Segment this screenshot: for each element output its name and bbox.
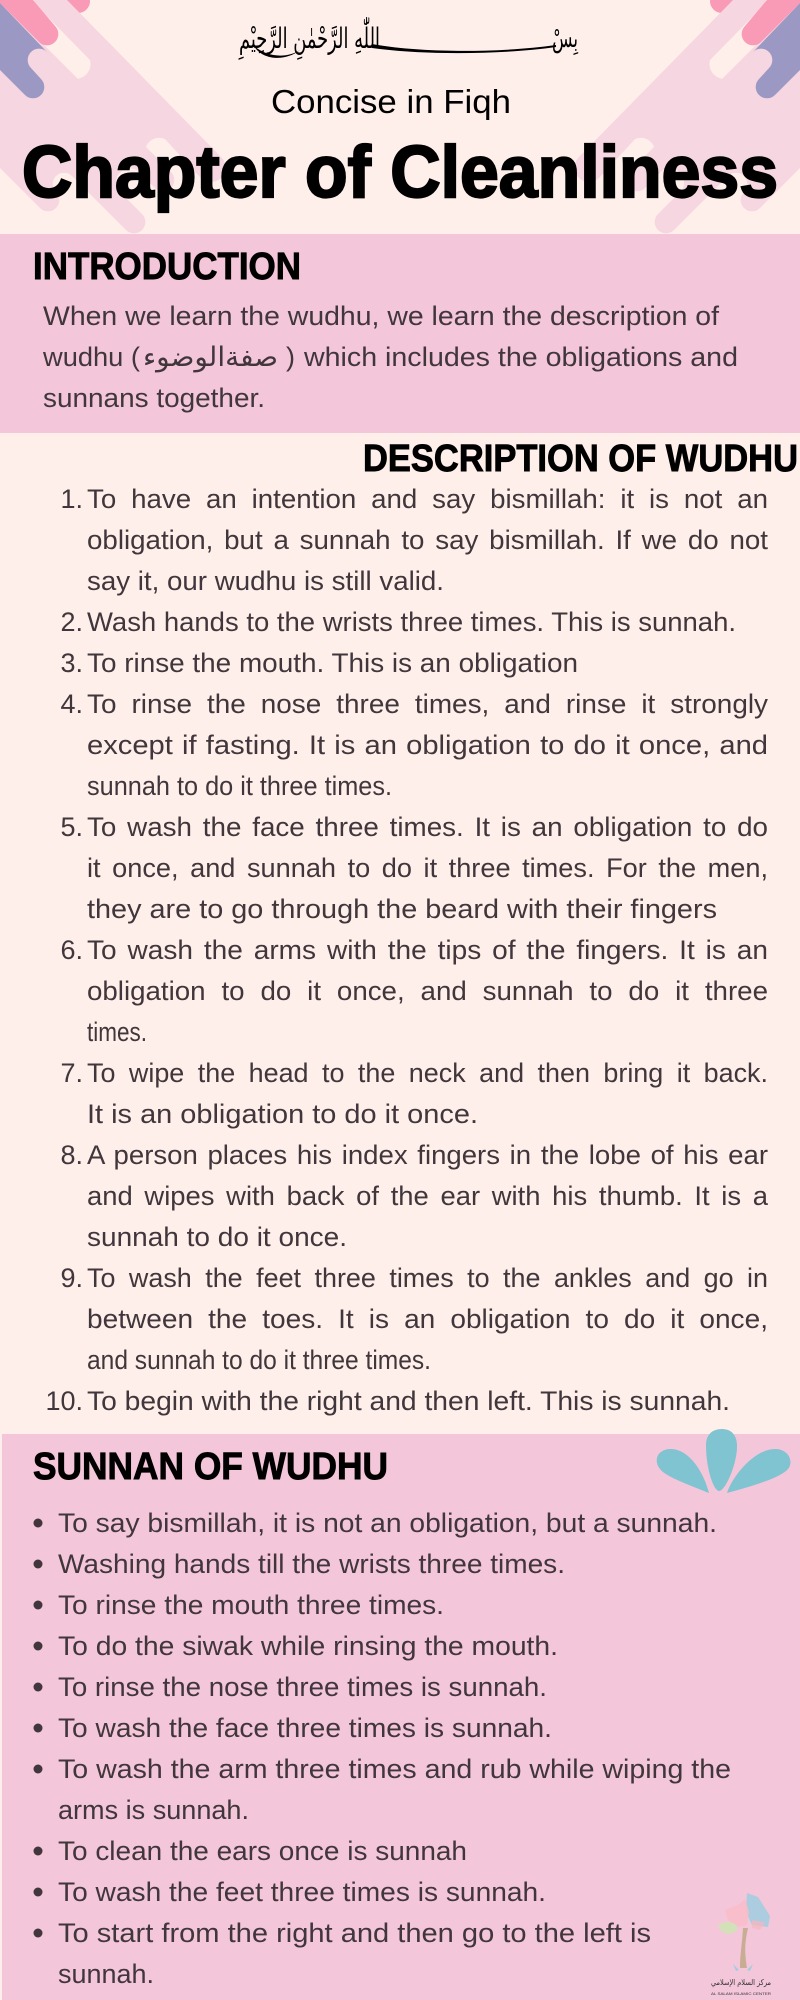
heading: introduction: INTRODUCTION bbox=[33, 246, 301, 288]
bullet list: sunnan items: To say bismillah, it is not an obligation, but a sunnah. bbox=[58, 1508, 717, 1538]
step 5: To wash the face three times. It is an obligation to do bbox=[87, 812, 768, 842]
step 5: they are to go through the beard with their fingers bbox=[87, 894, 717, 924]
step 7: It is an obligation to do it once. bbox=[87, 1099, 478, 1129]
step 9: To wash the feet three times to the ankles and go in bbox=[87, 1263, 768, 1293]
logo: Al Salam Islamic Center tree bbox=[711, 1893, 771, 1996]
step 8: sunnah to do it once. bbox=[87, 1222, 347, 1252]
step 7 bbox=[60, 1058, 768, 1129]
step 7: 7. bbox=[60, 1058, 83, 1088]
step 2: 2. bbox=[60, 607, 83, 637]
step 10: 10. bbox=[45, 1386, 83, 1416]
step 4: sunnah to do it three times. bbox=[87, 771, 392, 801]
step 6: To wash the arms with the tips of the fingers. It is an bbox=[87, 935, 768, 965]
step 5 bbox=[60, 812, 768, 924]
step 8 bbox=[60, 1140, 769, 1252]
text block: introduction bbox=[42, 301, 738, 413]
step 4: To rinse the nose three times, and rinse it strongly bbox=[87, 689, 769, 719]
panel: sunnan of wudhu bbox=[2, 1429, 800, 2000]
step 1: To have an intention and say bismillah: it is not an bbox=[87, 484, 768, 514]
text block: introduction: When we learn the wudhu, we learn the description of bbox=[43, 301, 720, 331]
step 3: 3. bbox=[60, 648, 83, 678]
step 5: it once, and sunnah to do it three times. For the men, bbox=[87, 853, 768, 883]
bullet list: sunnan items: To wash the feet three times is sunnah. bbox=[58, 1877, 546, 1907]
numbered list: description of wudhu bbox=[45, 484, 769, 1416]
step 1: say it, our wudhu is still valid. bbox=[87, 566, 444, 596]
bullet list: sunnan items: To rinse the mouth three times. bbox=[58, 1590, 444, 1620]
step 8: A person places his index fingers in the lobe of his ear bbox=[87, 1140, 768, 1170]
heading: sunnan of wudhu: SUNNAN OF WUDHU bbox=[33, 1446, 388, 1488]
step 1: obligation, but a sunnah to say bismillah. If we do not bbox=[87, 525, 768, 555]
text block: introduction: ) bbox=[286, 342, 295, 372]
text block: introduction: صفةالوضوء bbox=[143, 342, 278, 373]
step 1: 1. bbox=[60, 484, 83, 514]
bullet list: sunnan items: To do the siwak while rinsing the mouth. bbox=[58, 1631, 558, 1661]
step 4 bbox=[60, 689, 769, 801]
step 5: 5. bbox=[60, 812, 83, 842]
step 2: Wash hands to the wrists three times. This is sunnah. bbox=[87, 607, 736, 637]
step 8: and wipes with back of the ear with his thumb. It is a bbox=[87, 1181, 769, 1211]
step 4: 4. bbox=[60, 689, 83, 719]
text block: introduction: wudhu ( bbox=[42, 342, 140, 372]
decoration: right corner stripes bbox=[574, 0, 800, 233]
bullet list: sunnan items: To start from the right and then go to the left is bbox=[58, 1918, 651, 1948]
step 4: except if fasting. It is an obligation to do it once, and bbox=[87, 730, 768, 760]
step 8: 8. bbox=[60, 1140, 83, 1170]
step 6: obligation to do it once, and sunnah to do it three bbox=[87, 976, 768, 1006]
text block: introduction: which includes the obligations and bbox=[303, 342, 738, 372]
step 7: To wipe the head to the neck and then bring it back. bbox=[87, 1058, 768, 1088]
step 9: 9. bbox=[60, 1263, 83, 1293]
step 10: To begin with the right and then left. This is sunnah. bbox=[87, 1386, 730, 1416]
bullet list: sunnan items: To clean the ears once is sunnah bbox=[58, 1836, 467, 1866]
logo: Al Salam Islamic Center tree: AL SALAM ISLAMIC CENTER bbox=[711, 1991, 771, 1996]
step 9: between the toes. It is an obligation to do it once, bbox=[87, 1304, 768, 1334]
bismillah calligraphy: اللّٰهِ الرَّحْمٰنِ الرَّحِيْمِ bbox=[239, 17, 380, 60]
step 3: To rinse the mouth. This is an obligation bbox=[87, 648, 578, 678]
icon: teal petals bbox=[657, 1429, 790, 1493]
bullet list: sunnan items: To rinse the nose three times is sunnah. bbox=[58, 1672, 547, 1702]
logo: Al Salam Islamic Center tree: مركز السلام الإسلامي bbox=[711, 1978, 771, 1988]
bullet list: sunnan items: sunnah. bbox=[58, 1959, 154, 1989]
text block: introduction: sunnans together. bbox=[43, 383, 265, 413]
bismillah calligraphy bbox=[239, 17, 579, 60]
bismillah calligraphy: بِسْ bbox=[552, 24, 579, 55]
panel: introduction bbox=[0, 234, 800, 433]
title: Chapter of Cleanliness bbox=[22, 132, 778, 213]
step 9 bbox=[60, 1263, 768, 1375]
step 6: times. bbox=[87, 1017, 147, 1047]
bullet list: sunnan items: To wash the face three times is sunnah. bbox=[58, 1713, 552, 1743]
step 9: and sunnah to do it three times. bbox=[87, 1345, 431, 1375]
step 6 bbox=[60, 935, 768, 1047]
bullet list: sunnan items: To wash the arm three times and rub while wiping the bbox=[58, 1754, 731, 1784]
bullet list: sunnan items: Washing hands till the wrists three times. bbox=[58, 1549, 565, 1579]
decoration: left corner stripes bbox=[0, 0, 226, 233]
bullet list: sunnan items: arms is sunnah. bbox=[58, 1795, 249, 1825]
step 1 bbox=[60, 484, 768, 596]
step 6: 6. bbox=[60, 935, 83, 965]
subtitle: Concise in Fiqh bbox=[271, 83, 511, 120]
bullet list: sunnan items bbox=[34, 1508, 731, 1989]
